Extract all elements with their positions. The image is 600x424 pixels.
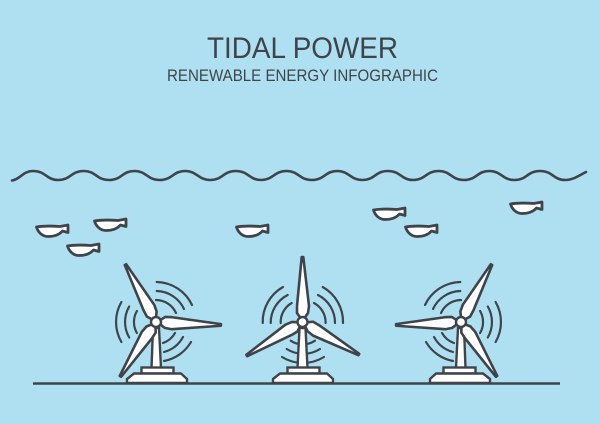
hub	[151, 317, 161, 327]
energy arcs	[116, 282, 192, 361]
title: TIDAL POWER	[207, 32, 398, 65]
turbine left	[115, 262, 221, 383]
fish 6	[406, 225, 437, 236]
turbine right	[396, 262, 502, 383]
tower	[456, 328, 466, 368]
blades	[396, 262, 502, 379]
tower	[152, 328, 161, 368]
tower	[298, 328, 308, 368]
turbine centre	[243, 257, 362, 383]
subtitle: RENEWABLE ENERGY INFOGRAPHIC	[167, 66, 438, 85]
hub	[456, 317, 466, 327]
fish 4	[236, 225, 268, 236]
base	[430, 368, 490, 383]
seabed line	[33, 382, 560, 385]
energy arcs	[263, 287, 343, 363]
blades	[243, 257, 362, 360]
fish 7	[510, 202, 542, 214]
fish 5	[374, 208, 405, 220]
fish 3	[68, 244, 99, 256]
base	[127, 368, 187, 383]
energy arcs	[425, 282, 501, 361]
fish 2	[94, 219, 126, 230]
fish group	[36, 202, 542, 256]
fish 1	[36, 225, 68, 236]
blades	[115, 262, 221, 379]
water surface wave	[12, 171, 586, 180]
base	[273, 368, 333, 383]
hub	[298, 317, 308, 327]
